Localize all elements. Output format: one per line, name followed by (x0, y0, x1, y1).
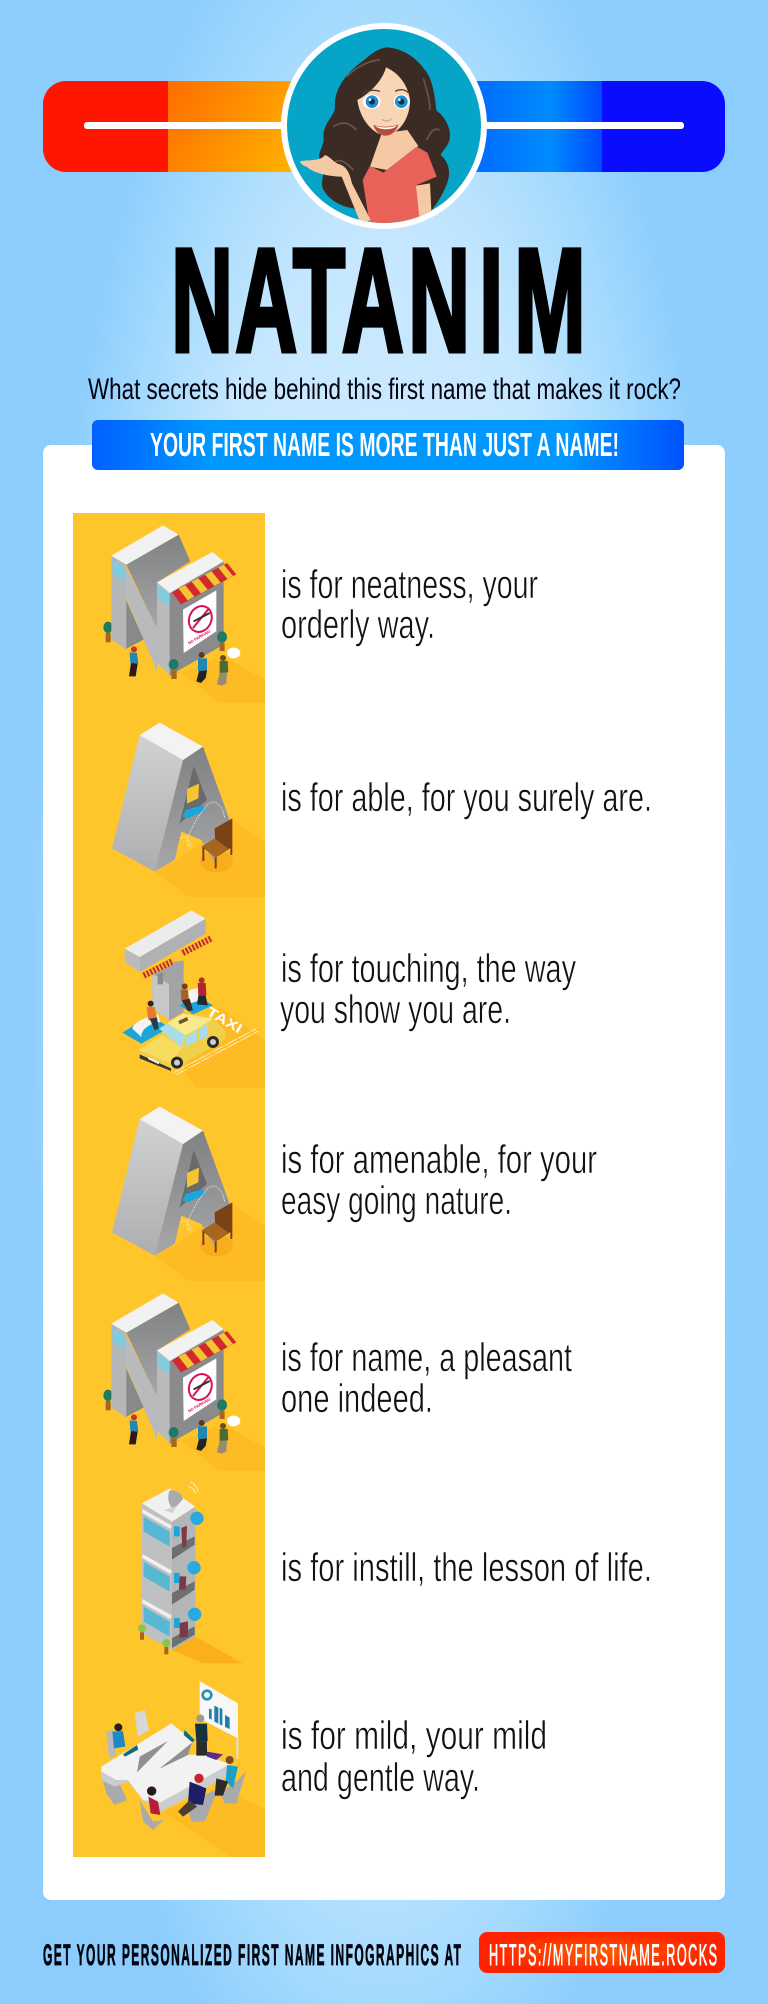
banner (92, 420, 684, 470)
tile 3: letter T with taxi (73, 897, 265, 1089)
letter M description: is for mild, your mild (281, 1714, 547, 1758)
second letter A description: easy going nature. (281, 1179, 512, 1223)
taxi car (139, 1014, 226, 1071)
blue mats and benches (122, 988, 213, 1044)
seated and standing people (147, 977, 208, 1030)
portrait medallion: cartoon woman (281, 23, 487, 229)
awning (172, 563, 236, 604)
chart board (200, 1681, 238, 1758)
letter N description (281, 563, 538, 647)
awnings (142, 938, 211, 976)
blue bubbles (187, 1512, 204, 1621)
floors and workers (172, 1526, 195, 1648)
second letter N description (281, 1336, 572, 1421)
footer url button: HTTPS://MYFIRSTNAME.ROCKS (489, 1938, 717, 1972)
letter N description: is for neatness, your (281, 563, 538, 607)
second letter N description: is for name, a pleasant (281, 1336, 572, 1380)
title: NATANIM: NATANIM (171, 219, 585, 383)
pedestrians (129, 646, 240, 686)
no parking sign (183, 590, 216, 653)
tile 5: letter N building (repeat) (73, 1281, 265, 1473)
tile 4: letter A with chair (repeat) (73, 1089, 265, 1281)
letter T description (280, 947, 576, 1032)
T letter (125, 910, 206, 1020)
tower faces (142, 1488, 195, 1650)
letter M description: and gentle way. (281, 1756, 480, 1800)
M table (101, 1723, 230, 1813)
footer call to action: GET YOUR PERSONALIZED FIRST NAME INFOGRAPHICS AT (43, 1937, 461, 1972)
plants (138, 1624, 170, 1654)
N faces (111, 525, 224, 676)
windows and ledges (142, 1509, 172, 1637)
tile 7: letter M meeting table (73, 1665, 265, 1857)
letter N description: orderly way. (281, 603, 435, 647)
meeting participants (112, 1714, 238, 1817)
TAXI ground lettering: TAXI (204, 1004, 245, 1036)
chairs (101, 1710, 246, 1830)
letter M description (281, 1714, 547, 1800)
white content panel (43, 445, 725, 1900)
tile 1: letter N building (73, 513, 265, 705)
road lines (173, 1029, 258, 1075)
tile 2: letter A with chair (73, 705, 265, 897)
letter T description: you show you are. (280, 988, 511, 1032)
tile 6: letter I tower (73, 1473, 265, 1665)
second letter A description: is for amenable, for your (281, 1138, 597, 1182)
satellite dish (164, 1482, 198, 1513)
second letter A description (281, 1138, 597, 1223)
no parking sign: NO PARKING (187, 629, 211, 646)
header ribbon bar (43, 81, 725, 172)
chair (201, 818, 232, 868)
A faces (112, 723, 230, 872)
letter T description: is for touching, the way (281, 947, 576, 991)
second letter N description: one indeed. (281, 1377, 433, 1421)
